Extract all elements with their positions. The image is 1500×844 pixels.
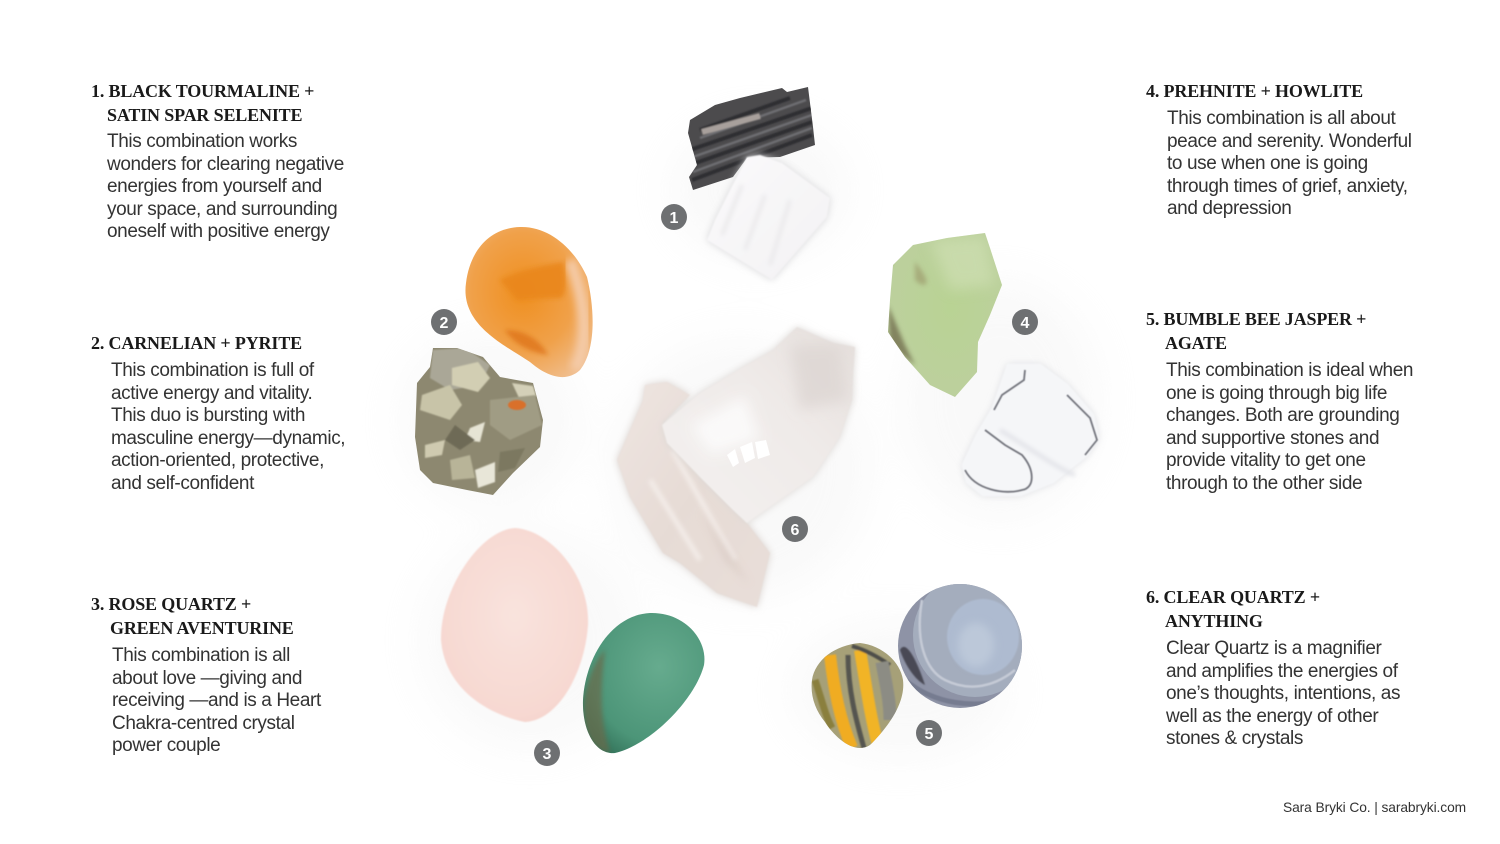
number badges: 3 <box>543 746 552 763</box>
text 2: This combination is full of active energy and vitality. This duo is bursting with masculine energy—dynamic, action-oriented, protective, and self-confident <box>111 360 345 494</box>
stone 1: black tourmaline and satin spar selenite <box>680 80 830 280</box>
text 5: This combination is ideal when one is going through big life changes. Both are grounding and supportive stones and provide vitality to get one through to the other side <box>1166 360 1413 494</box>
number badges: 6 <box>791 522 800 539</box>
heading 4: 4. PREHNITE + HOWLITE <box>1146 81 1363 101</box>
number badges: 4 <box>1021 315 1030 332</box>
prehnite <box>885 230 1005 400</box>
green aventurine <box>582 613 704 754</box>
credit: Sara Bryki Co. | sarabryki.com <box>1283 800 1466 815</box>
agate <box>898 584 1022 708</box>
howlite <box>963 365 1098 495</box>
black tourmaline <box>688 87 815 190</box>
soft background shadow <box>400 120 1100 760</box>
pyrite <box>415 348 543 495</box>
number badges <box>431 204 1038 766</box>
text 1: This combination works wonders for clearing negative energies from yourself and your space, and surrounding oneself with positive energy <box>107 131 344 242</box>
text 6: Clear Quartz is a magnifier and amplifies the energies of one’s thoughts, intentions, as well as the energy of other stones & crystals <box>1166 638 1400 749</box>
carnelian <box>465 227 593 378</box>
heading 5: 5. BUMBLE BEE JASPER + AGATE <box>1146 309 1366 352</box>
number badges: 2 <box>440 315 449 332</box>
upper crystal <box>662 327 855 523</box>
stone 5: bumble bee jasper and agate <box>812 584 1022 748</box>
number badges: 5 <box>925 726 934 743</box>
stone 3: rose quartz and green aventurine <box>441 528 715 760</box>
stone 2: carnelian and pyrite <box>410 225 600 500</box>
text 3: This combination is all about love —giving and receiving —and is a Heart Chakra-centred crystal power couple <box>112 645 321 756</box>
bumble bee jasper <box>812 643 904 748</box>
number badges: 1 <box>670 210 679 227</box>
stone 6: clear quartz <box>617 327 855 607</box>
stones illustration <box>415 87 1102 766</box>
rose quartz <box>441 528 588 722</box>
heading 1: 1. BLACK TOURMALINE + SATIN SPAR SELENITE <box>91 81 314 124</box>
heading 6: 6. CLEAR QUARTZ + ANYTHING <box>1146 587 1320 630</box>
lower crystal <box>617 382 770 607</box>
satin spar selenite <box>707 155 830 280</box>
stone 4: prehnite and howlite <box>885 230 1098 495</box>
text 4: This combination is all about peace and serenity. Wonderful to use when one is going through times of grief, anxiety, and depression <box>1167 108 1412 219</box>
heading 2: 2. CARNELIAN + PYRITE <box>91 333 302 353</box>
heading 3: 3. ROSE QUARTZ + GREEN AVENTURINE <box>91 594 294 638</box>
